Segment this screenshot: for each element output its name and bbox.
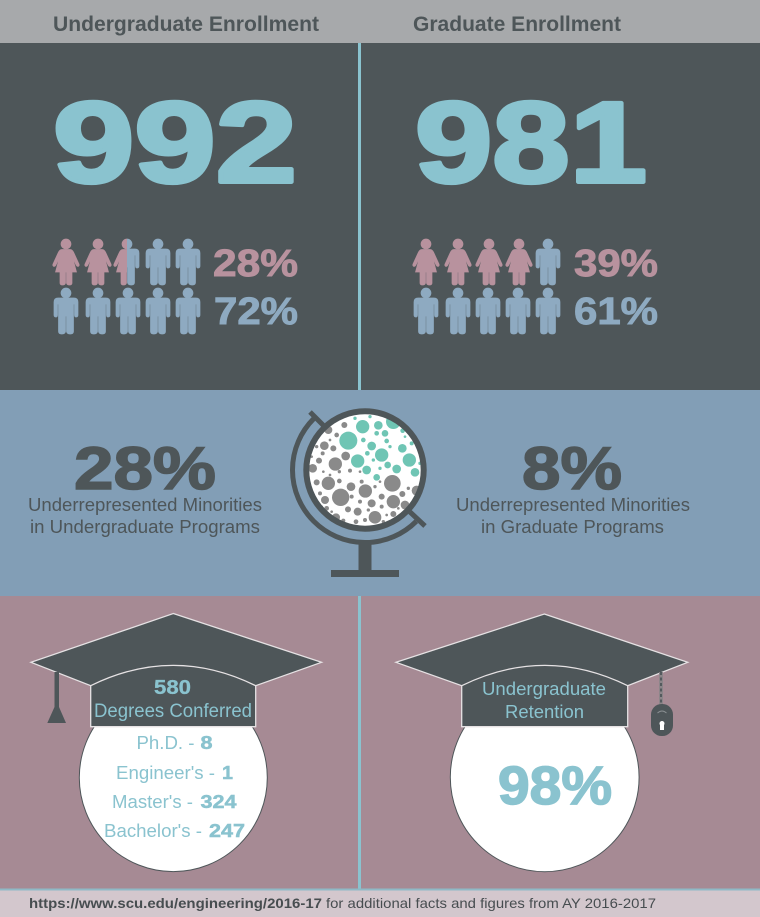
footer source line: for additional facts and figures from AY 2016-2017 xyxy=(326,895,656,911)
heading: undergraduate enrollment: Undergraduate Enrollment xyxy=(53,13,319,36)
list: degree counts: 1 xyxy=(222,762,233,783)
tassel: lock and chain xyxy=(651,672,673,736)
label: 580 degrees conferred xyxy=(94,677,252,722)
number: undergraduate enrollment: 992 xyxy=(53,79,297,207)
footer source line: https://www.scu.edu/engineering/2016-17 xyxy=(29,895,322,911)
list: degree counts xyxy=(104,732,245,841)
label: undergraduate retention xyxy=(482,678,606,722)
icons: undergraduate women row xyxy=(53,239,200,285)
stat: graduate women: 39% xyxy=(574,243,658,285)
list: degree counts: Bachelor's - xyxy=(104,821,202,841)
icons: undergraduate men row xyxy=(54,288,200,334)
label: 580 degrees conferred: 580 xyxy=(154,677,191,699)
tassel xyxy=(47,672,66,723)
stat: undergraduate minorities: 28% xyxy=(74,435,216,502)
list: degree counts: Engineer's - xyxy=(116,763,215,783)
list: degree counts: 8 xyxy=(200,732,212,753)
minorities panel background xyxy=(0,390,760,596)
header band xyxy=(0,0,760,43)
label: 580 degrees conferred: Degrees Conferred xyxy=(94,701,252,722)
icons: graduate men row xyxy=(414,288,560,334)
degrees panel background xyxy=(0,596,760,889)
icon: mortarboard with undergraduate retention xyxy=(396,614,688,872)
list: degree counts: 324 xyxy=(200,791,237,812)
stat: undergraduate minorities: Underrepresented Minorities xyxy=(28,494,262,515)
enrollment panel background xyxy=(0,43,760,390)
stat: graduate minorities: 8% xyxy=(522,435,622,502)
icon: globe xyxy=(292,410,425,577)
list: degree counts: Master's - xyxy=(112,792,193,812)
stat: undergraduate minorities: in Undergraduate Programs xyxy=(30,516,260,537)
label: undergraduate retention: Retention xyxy=(505,701,584,722)
stat: graduate minorities: Underrepresented Minorities xyxy=(456,494,690,515)
stat: undergraduate men: 72% xyxy=(214,291,298,333)
label: undergraduate retention: Undergraduate xyxy=(482,678,606,699)
stat: undergraduate women: 28% xyxy=(213,243,298,285)
footer band xyxy=(0,889,760,917)
list: degree counts: Ph.D. - xyxy=(136,733,195,753)
list: degree counts: 247 xyxy=(209,820,245,841)
icon: mortarboard with degrees conferred xyxy=(31,614,322,872)
stat: undergraduate minorities xyxy=(28,435,262,537)
number: graduate enrollment: 981 xyxy=(415,79,647,207)
stat: graduate minorities: in Graduate Programs xyxy=(481,516,664,537)
stat: graduate men: 61% xyxy=(574,291,658,333)
stat: graduate minorities xyxy=(456,435,690,537)
stat: 98% retention: 98% xyxy=(498,756,612,816)
heading: graduate enrollment: Graduate Enrollment xyxy=(413,13,621,36)
icons: graduate women row xyxy=(413,239,560,285)
footer source line xyxy=(29,895,656,911)
